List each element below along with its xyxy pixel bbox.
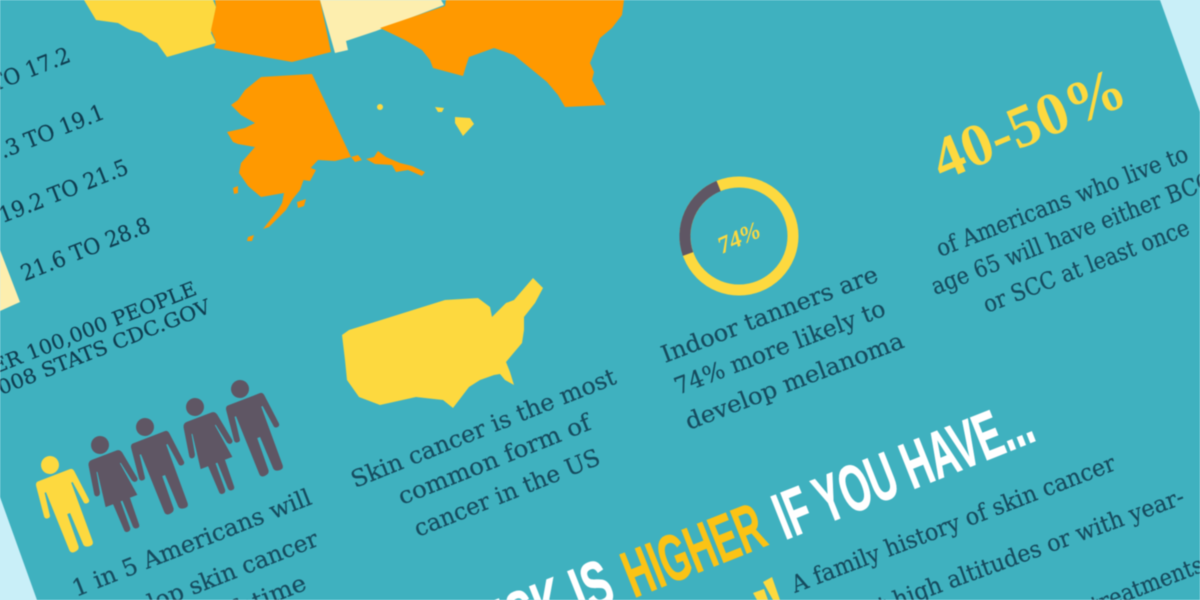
legend swatch [0,250,20,311]
donut chart: 74%: 74% [714,218,765,259]
map: Hawaii [377,104,474,136]
text: skin cancer most common: cancer in the US [410,443,604,543]
text: risk factor list: A family history of skin cancer [786,449,1120,599]
map of US states [84,0,624,107]
legend labels [0,43,154,287]
heading: risk is higher if you have [458,384,1043,600]
icon: five people, one highlighted [24,372,295,558]
text: skin cancer most common: common form of [394,408,597,511]
text: skin cancer most common: Skin cancer is the most [347,362,621,494]
legend labels: 21.6 TO 28.8 [18,213,154,287]
text: indoor tanners: develop melanoma [681,326,908,436]
big stat: 40-50%: 40-50% [922,54,1135,193]
text: indoor tanners: Indoor tanners are [657,260,882,369]
icon: yellow bars [753,577,780,600]
map: Alaska [227,74,425,241]
text: indoor tanners [657,260,908,436]
icon: yellow US map [342,278,543,408]
donut chart: 74% [685,182,793,290]
text: 1 in 5 Americans: 1 in 5 Americans will [68,483,315,600]
text: indoor tanners: 74% more likely to [670,294,889,401]
